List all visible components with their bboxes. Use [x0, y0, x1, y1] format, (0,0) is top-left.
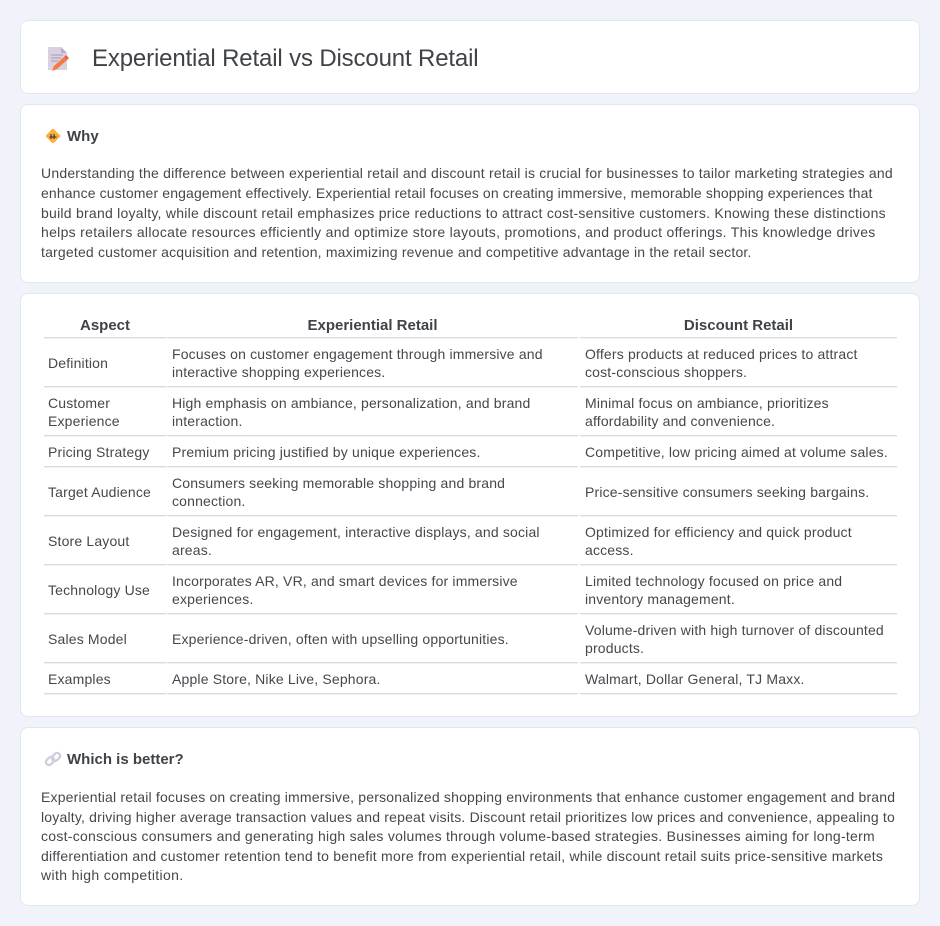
table header: Aspect: [80, 317, 130, 334]
text block: which is better paragraph: differentiation and customer retention tend to benefit more from experiential retail, while discount retail suits price-sensitive markets: [41, 848, 883, 864]
text block: why paragraph: build brand loyalty, while discount retail emphasizes price reductions to attract cost-sensitive customers. Knowing these distinctions: [41, 205, 886, 221]
row: pricing strategy: Pricing Strategy: [48, 444, 150, 460]
row: technology use: inventory management.: [585, 591, 735, 607]
row: target audience: Target Audience: [48, 484, 151, 500]
row: definition: [48, 346, 858, 380]
icon: chain link: [44, 752, 62, 766]
panel: which is better: [20, 727, 920, 906]
row: pricing strategy: Competitive, low pricing aimed at volume sales.: [585, 444, 888, 460]
row: target audience: connection.: [172, 493, 245, 509]
row: customer experience: Experience: [48, 413, 120, 429]
table header: Experiential Retail: [307, 317, 438, 334]
icon: document with pencil: [48, 47, 69, 71]
panel: page header: [20, 20, 920, 94]
row: sales model: Sales Model: [48, 631, 127, 647]
row: technology use: Incorporates AR, VR, and smart devices for immersive: [172, 573, 518, 589]
row: store layout: access.: [585, 542, 634, 558]
row: definition: cost-conscious shoppers.: [585, 364, 747, 380]
row: technology use: experiences.: [172, 591, 253, 607]
row: customer experience: High emphasis on ambiance, personalization, and brand: [172, 395, 530, 411]
row: definition: Offers products at reduced prices to attract: [585, 346, 858, 362]
row: store layout: [48, 524, 852, 558]
row: customer experience: Minimal focus on ambiance, prioritizes: [585, 395, 829, 411]
row: examples: Walmart, Dollar General, TJ Maxx.: [585, 671, 805, 687]
row: pricing strategy: Premium pricing justified by unique experiences.: [172, 444, 481, 460]
table header: Discount Retail: [684, 317, 793, 334]
row: examples: [48, 671, 805, 687]
row: store layout: Designed for engagement, interactive displays, and social: [172, 524, 540, 540]
row: sales model: Volume-driven with high turnover of discounted: [585, 622, 884, 638]
title: Experiential Retail vs Discount Retail: [92, 44, 478, 72]
row: definition: interactive shopping experiences.: [172, 364, 385, 380]
row: customer experience: interaction.: [172, 413, 243, 429]
row: technology use: [48, 573, 842, 607]
row: examples: Apple Store, Nike Live, Sephora.: [172, 671, 381, 687]
table header: [80, 317, 793, 334]
text block: why paragraph: [41, 165, 893, 260]
row: customer experience: affordability and convenience.: [585, 413, 775, 429]
text block: which is better paragraph: [41, 789, 895, 883]
text block: which is better paragraph: loyalty, driving higher average transaction values and repeat visits. Discount retail prioritizes low prices and convenience, appealing to: [41, 809, 895, 825]
row: sales model: Experience-driven, often with upselling opportunities.: [172, 631, 509, 647]
text block: why paragraph: Understanding the difference between experiential retail and discount retail is crucial for businesses to tailor marketing strategies and: [41, 165, 893, 181]
row: store layout: Store Layout: [48, 533, 129, 549]
text block: which is better paragraph: Experiential retail focuses on creating immersive, personalized shopping environments that enhance customer engagement and brand: [41, 789, 895, 805]
row: sales model: products.: [585, 640, 644, 656]
row: customer experience: Customer: [48, 395, 110, 411]
row: customer experience: [48, 395, 829, 429]
row: definition: Definition: [48, 355, 108, 371]
row: target audience: Price-sensitive consumers seeking bargains.: [585, 484, 869, 500]
heading: why: Why: [67, 128, 99, 144]
row: technology use: Technology Use: [48, 582, 150, 598]
text block: which is better paragraph: cost-conscious consumers and generating high sales volumes through volume-based strategies. Businesses aiming for long-term: [41, 828, 875, 844]
panel: why: [20, 104, 920, 283]
text block: why paragraph: targeted customer acquisition and retention, maximizing revenue and competitive advantage in the retail sector.: [41, 244, 752, 260]
row: definition: Focuses on customer engagement through immersive and: [172, 346, 543, 362]
row: examples: Examples: [48, 671, 111, 687]
text block: why paragraph: enhance customer engagement effectively. Experiential retail focuses on creating immersive, memorable shopping experiences that: [41, 185, 873, 201]
row: target audience: [48, 475, 869, 509]
panel: comparison table: [20, 293, 920, 717]
row: pricing strategy: [48, 444, 888, 460]
row: store layout: Optimized for efficiency and quick product: [585, 524, 852, 540]
text block: why paragraph: helps retailers allocate resources efficiently and optimize store layouts, promotions, and product offerings. This knowledge drives: [41, 224, 876, 240]
icon: warning diamond: [46, 128, 60, 144]
row: sales model: [48, 622, 884, 656]
text block: which is better paragraph: with high competition.: [41, 867, 184, 883]
heading: which is better: Which is better?: [67, 750, 184, 768]
row: technology use: Limited technology focused on price and: [585, 573, 842, 589]
row: store layout: areas.: [172, 542, 212, 558]
row: target audience: Consumers seeking memorable shopping and brand: [172, 475, 505, 491]
